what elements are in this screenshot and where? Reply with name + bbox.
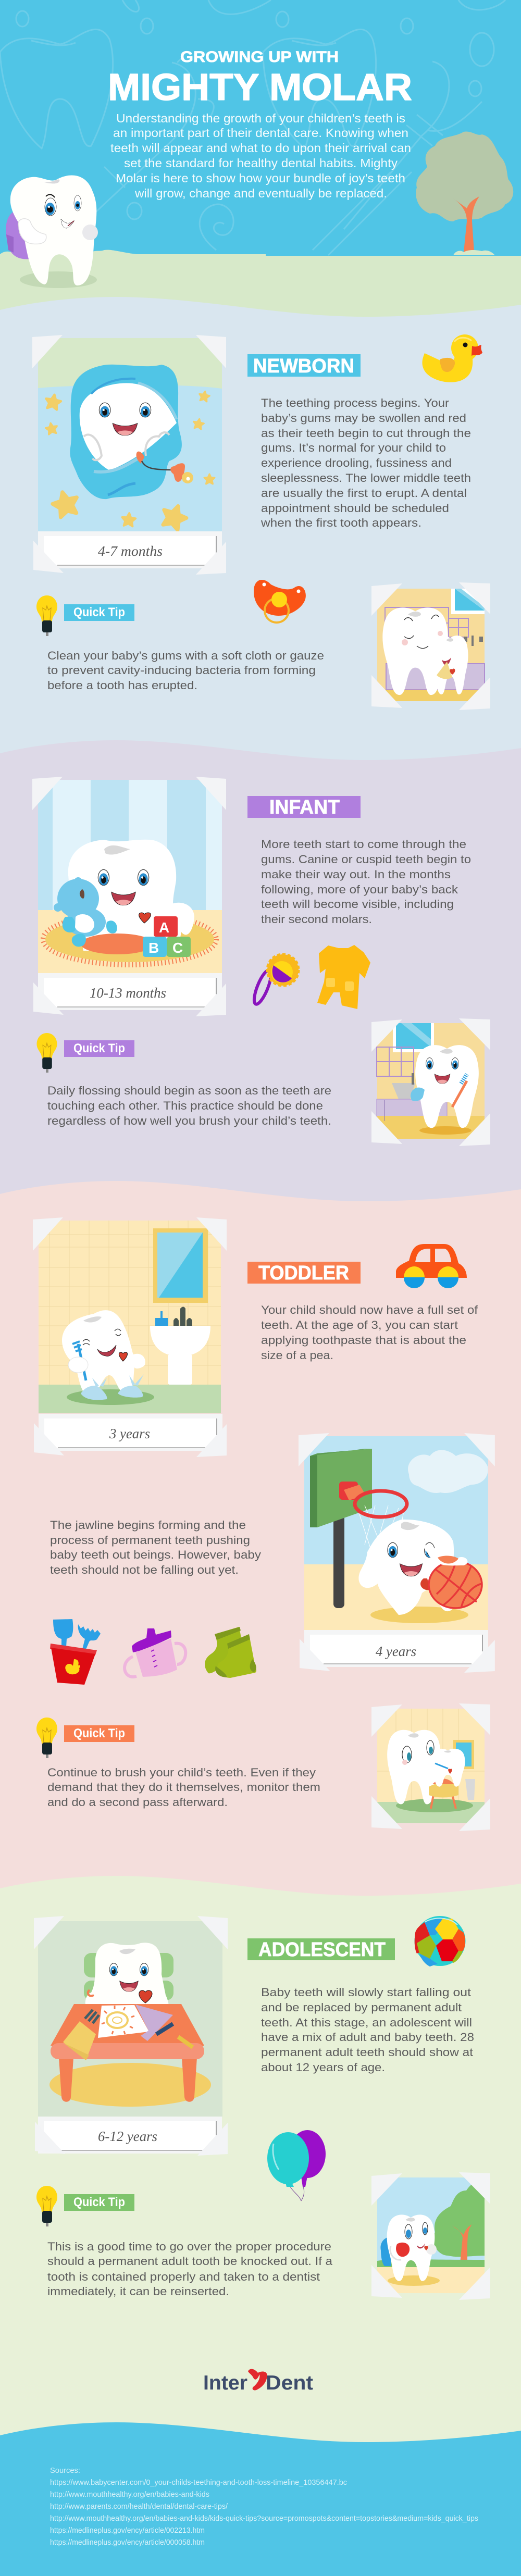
intro paragraph: an important part of their dental care. Knowing when xyxy=(113,126,408,140)
photo frame: adolescent drawing illustration xyxy=(34,1916,228,2156)
footer xyxy=(0,2422,521,2576)
body text: newborn: sleeplessness. The lower middle teeth xyxy=(261,471,471,484)
heading: adolescent: ADOLESCENT xyxy=(258,1939,386,1961)
intro paragraph xyxy=(110,111,411,200)
title xyxy=(108,48,412,108)
quick tip text: demand that they do it themselves, monitor them xyxy=(47,1781,320,1794)
icon: romper xyxy=(317,945,370,1009)
icon: sippy cup xyxy=(125,1628,185,1677)
quick tip badge xyxy=(36,595,134,636)
body text: adolescent xyxy=(261,1986,474,2074)
intro paragraph: teeth will appear and what to do upon their arrival can xyxy=(110,141,411,155)
body text: infant: following, more of your baby’s back xyxy=(261,883,458,896)
body text: adolescent: about 12 years of age. xyxy=(261,2061,385,2074)
caption: 3 years: 3 years xyxy=(109,1426,150,1441)
photo frame: toddler bathroom illustration xyxy=(33,1217,227,1457)
caption: 6-12 years: 6-12 years xyxy=(98,2129,157,2144)
quick tip text: and do a second pass afterward. xyxy=(47,1796,228,1809)
photo: parent wiping baby tooth xyxy=(371,582,490,710)
icon: tree xyxy=(416,132,513,255)
quick tip text: This is a good time to go over the proper procedure xyxy=(47,2240,331,2253)
intro paragraph: Molar is here to show how your bundle of joy’s teeth xyxy=(116,171,405,185)
quick tip badge: Quick Tip xyxy=(73,1041,125,1055)
icon: rattle xyxy=(251,954,299,1006)
quick tip badge xyxy=(36,1718,134,1758)
photo: parent helping child brush xyxy=(371,1703,490,1831)
body text: adolescent: permanent adult teeth should show at xyxy=(261,2046,474,2059)
heading: infant: INFANT xyxy=(269,797,340,818)
body text: toddler: applying toothpaste that is about the xyxy=(261,1334,466,1347)
body text: newborn xyxy=(260,396,471,529)
body text: newborn: experience drooling, fussiness and xyxy=(261,456,452,469)
title: MIGHTY MOLAR xyxy=(108,67,412,108)
quick tip text: should a permanent adult tooth be knocked out. If a xyxy=(47,2255,333,2268)
body text: infant xyxy=(261,838,471,926)
body text: jawline: teeth should not be falling out yet. xyxy=(50,1563,239,1576)
body text: infant: teeth will become visible, including xyxy=(261,898,454,911)
photo frame: infant illustration: A xyxy=(159,919,169,936)
caption: 10-13 months: 10-13 months xyxy=(90,985,166,1001)
body text: infant: their second molars. xyxy=(261,913,372,926)
quick tip text: regardless of how well you brush your child’s teeth. xyxy=(47,1114,331,1127)
body text: jawline: baby teeth out beings. However, baby xyxy=(50,1548,262,1561)
icon: colorful ball xyxy=(415,1916,466,1967)
body text: infant: gums. Canine or cuspid teeth begin to xyxy=(261,853,471,866)
body text: newborn: as their teeth begin to cut through the xyxy=(261,427,471,440)
body text: newborn: are usually the first to erupt. A dental xyxy=(261,487,467,500)
panel: toddler section xyxy=(0,1181,521,1907)
quick tip text xyxy=(47,2240,333,2298)
header background xyxy=(0,0,521,256)
body text: adolescent: teeth. At this stage, an adolescent will xyxy=(261,2016,472,2029)
quick tip text xyxy=(47,1084,331,1127)
title: GROWING UP WITH xyxy=(180,48,339,66)
quick tip badge: Quick Tip xyxy=(73,605,125,619)
quick tip text: to prevent cavity-inducing bacteria from forming xyxy=(47,664,316,677)
logo: InterDent: Dent xyxy=(266,2372,313,2394)
icon: toy car xyxy=(396,1244,467,1288)
quick tip badge: Quick Tip xyxy=(73,1726,125,1740)
body text: adolescent: have a mix of adult and baby teeth. 28 xyxy=(261,2031,474,2044)
quick tip text: Clean your baby’s gums with a soft cloth or gauze xyxy=(47,649,324,662)
heading: toddler: TODDLER xyxy=(258,1262,349,1284)
body text: adolescent: and be replaced by permanent adult xyxy=(261,2001,462,2014)
sources list xyxy=(50,2466,478,2547)
caption: 4-7 months: 4-7 months xyxy=(98,543,163,559)
photo frame: infant illustration: C xyxy=(172,940,183,956)
ground xyxy=(0,250,521,323)
icon: rubber duck xyxy=(422,334,482,382)
quick tip badge xyxy=(37,1033,134,1073)
body text: toddler: Your child should now have a full set of xyxy=(261,1303,478,1316)
icon: pacifier xyxy=(254,580,306,623)
panel: newborn section xyxy=(0,297,521,710)
body text: toddler: teeth. At the age of 3, you can start xyxy=(261,1318,458,1331)
body text: jawline: The jawline begins forming and the xyxy=(50,1519,246,1532)
body text: newborn: baby’s gums may be swollen and red xyxy=(261,412,466,425)
body text: toddler xyxy=(261,1303,478,1362)
body text: newborn: appointment should be scheduled xyxy=(261,502,449,515)
heading: newborn: NEWBORN xyxy=(253,355,354,377)
sources list: https://medlineplus.gov/ency/article/000058.htm xyxy=(50,2538,205,2547)
quick tip text xyxy=(47,649,324,692)
photo frame: infant illustration xyxy=(32,777,226,1016)
sources list: http://www.mouthhealthy.org/en/babies-and-kids/kids-quick-tips?source=promospots&content=topstories&medium=kids_quick_tips xyxy=(50,2514,478,2523)
quick tip badge: Quick Tip xyxy=(73,2195,125,2209)
quick tip text: Daily flossing should begin as soon as the teeth are xyxy=(47,1084,331,1097)
photo frame: infant illustration: B xyxy=(148,940,159,956)
body text: toddler: size of a pea. xyxy=(261,1349,333,1362)
intro paragraph: set the standard for healthy dental habits. Mighty xyxy=(124,156,398,170)
icon: balloons xyxy=(267,2130,326,2201)
logo: InterDent: Inter xyxy=(203,2372,247,2394)
body text: jawline: process of permanent teeth pushing xyxy=(50,1534,250,1547)
heading: infant xyxy=(247,796,361,818)
photo: tooth flossing in bathroom xyxy=(371,1018,490,1146)
intro paragraph: Understanding the growth of your children’s teeth is xyxy=(116,111,405,125)
sources list: https://www.babycenter.com/0_your-childs-teething-and-tooth-loss-timeline_10356447.bc xyxy=(50,2478,347,2487)
quick tip text xyxy=(47,1766,320,1809)
body text: newborn: gums. It’s normal for your child to xyxy=(261,441,446,454)
sources list: http://www.mouthhealthy.org/en/babies-and-kids xyxy=(50,2490,209,2499)
quick tip text: before a tooth has erupted. xyxy=(47,679,197,692)
sources list: Sources: xyxy=(50,2466,80,2475)
sources list: http://www.parents.com/health/dental/dental-care-tips/ xyxy=(50,2502,228,2511)
body text: infant: More teeth start to come through the xyxy=(261,838,466,851)
body text: adolescent: Baby teeth will slowly start falling out xyxy=(261,1986,472,1999)
body text: infant: make their way out. In the months xyxy=(261,868,451,881)
quick tip text: Continue to brush your child’s teeth. Even if they xyxy=(47,1766,316,1779)
quick tip text: tooth is contained properly and taken to a dentist xyxy=(47,2270,320,2283)
photo frame: newborn illustration xyxy=(32,335,226,575)
quick tip text: touching each other. This practice should be done xyxy=(47,1099,323,1112)
intro paragraph: will grow, change and eventually be replaced. xyxy=(134,186,387,200)
photo frame: basketball illustration xyxy=(299,1433,495,1673)
icon: sand bucket and tools xyxy=(50,1619,101,1685)
icon: socks xyxy=(205,1627,256,1678)
photo: tooth with apple outdoors xyxy=(371,2172,490,2300)
mascot: Mighty Molar with backpack xyxy=(6,176,98,288)
body text: newborn: The teething process begins. Your xyxy=(261,396,450,409)
caption: 4 years: 4 years xyxy=(376,1644,416,1659)
quick tip text: immediately, it can be reinserted. xyxy=(47,2285,229,2298)
panel: adolescent section xyxy=(0,1876,521,2448)
panel: infant section xyxy=(0,740,521,1209)
body text: jawline xyxy=(50,1519,262,1576)
sources list: https://medlineplus.gov/ency/article/002213.htm xyxy=(50,2526,205,2535)
body text: newborn: when the first tooth appears. xyxy=(260,516,421,529)
quick tip badge xyxy=(36,2186,134,2226)
logo: InterDent xyxy=(203,2369,313,2394)
